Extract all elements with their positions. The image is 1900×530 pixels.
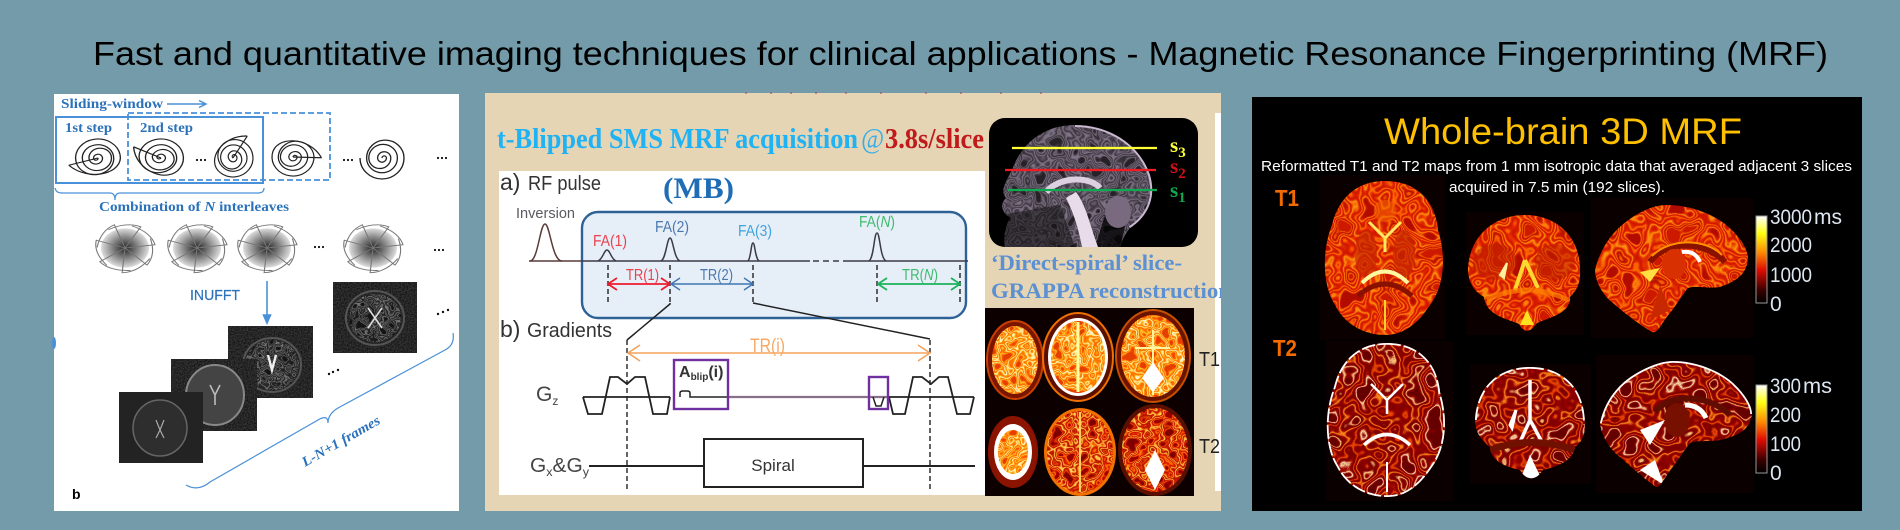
blip boxes	[674, 360, 888, 409]
T1 sagittal map	[1591, 198, 1753, 338]
T1 colour bar: 3000	[1770, 206, 1812, 229]
slice-GRAPPA heading: ‘Direct-spiral’ slice-	[991, 250, 1182, 275]
dashed timing guides	[608, 265, 960, 490]
TR arrows	[608, 278, 960, 361]
Gx and Gy label: G	[530, 455, 546, 477]
Gz label: G	[536, 383, 552, 406]
panel: sliding-window reconstruction	[52, 94, 459, 511]
SMS maps	[985, 308, 1194, 496]
flip-angle labels: FA(3)	[738, 223, 772, 240]
T1 colour bar: ms	[1814, 206, 1842, 229]
combined rosettes	[86, 215, 413, 279]
slice-GRAPPA heading	[992, 254, 1221, 298]
slice labels: s	[1170, 178, 1178, 202]
panel: t-blipped SMS MRF	[485, 93, 1231, 511]
head image	[1002, 125, 1152, 247]
slice labels: s	[1170, 154, 1178, 178]
blip label: (i)	[708, 364, 723, 381]
T1 colour bar: 0	[1770, 293, 1782, 316]
Gx and Gy label: x	[546, 465, 553, 479]
spiral readout: Spiral	[751, 456, 795, 475]
zoom connectors	[627, 303, 930, 340]
spiral readout	[589, 439, 975, 487]
T2 colour bar: 0	[1770, 462, 1782, 485]
acquisition heading: @	[861, 124, 884, 155]
flip-angle labels: FA(N)	[859, 214, 895, 231]
flip-angle labels	[593, 214, 895, 250]
ellipsis row two	[314, 246, 444, 251]
slice lines	[1005, 148, 1157, 190]
T2 map row	[988, 404, 1192, 496]
panel letter: b	[72, 486, 81, 502]
flip-angle labels: FA(1)	[593, 233, 627, 250]
T1 row label: T1	[1199, 349, 1220, 371]
T2 label: T2	[1273, 335, 1297, 361]
description: Reformatted T1 and T2 maps from 1 mm isotropic data that averaged adjacent 3 slices	[1261, 158, 1852, 175]
T1 colour bar: 1000	[1770, 264, 1812, 287]
combination label: Combination of N interleaves	[99, 200, 290, 215]
section a heading: a)	[500, 169, 520, 195]
frames label: L-N+1 frames	[299, 413, 384, 471]
title: Fast and quantitative imaging techniques for clinical applications - Magnetic Resonance Fingerprinting (MRF)	[93, 35, 1828, 72]
section a heading	[500, 169, 601, 195]
step labels	[65, 120, 193, 135]
slice labels	[1170, 133, 1186, 206]
T2 colour bar: 100	[1770, 433, 1801, 456]
T2 colour bar	[1756, 375, 1832, 485]
frames brace	[186, 333, 453, 488]
inversion label: Inversion	[516, 206, 575, 222]
acquisition heading: t-Blipped SMS MRF acquisition	[497, 124, 858, 155]
TR labels: TR(i)	[750, 336, 785, 357]
T2 row label: T2	[1199, 436, 1220, 458]
slice labels: 3	[1178, 145, 1186, 161]
sagittal slice inset	[989, 118, 1198, 250]
Gz waveform	[583, 377, 974, 414]
T1 colour bar	[1756, 206, 1842, 316]
description	[1261, 158, 1852, 196]
white diagram area	[499, 171, 985, 495]
sliding-window label: Sliding-window	[61, 96, 163, 111]
description: acquired in 7.5 min (192 slices).	[1449, 179, 1665, 196]
acquisition heading: 3.8s/slice	[885, 124, 984, 155]
step labels: 1st step	[65, 120, 112, 135]
Gz label: z	[552, 394, 558, 408]
INUFFT label: INUFFT	[190, 288, 240, 304]
brace under N interleaves	[55, 188, 264, 200]
section a heading: RF pulse	[528, 173, 601, 195]
sliding-window label	[61, 96, 206, 111]
section b heading: Gradients	[527, 320, 612, 342]
slice labels: s	[1170, 133, 1178, 157]
T1 axial map	[1320, 175, 1445, 340]
blip label: A	[679, 364, 691, 381]
T1 map row	[987, 310, 1190, 402]
spiral interleaves	[64, 128, 404, 185]
section b heading: b)	[500, 316, 520, 342]
RF pulse train	[529, 224, 968, 261]
T2 colour bar: 200	[1770, 404, 1801, 427]
T2 sagittal map	[1596, 355, 1754, 493]
image frames stack	[119, 282, 417, 463]
T1 coronal map	[1466, 212, 1584, 335]
flip-angle labels: FA(2)	[655, 219, 689, 236]
T2 colour bar: 300	[1770, 375, 1801, 398]
diagonal ellipsis	[328, 309, 449, 375]
Gx and Gy label: &G	[553, 455, 583, 477]
T2 colour bar: ms	[1803, 375, 1832, 398]
step labels: 2nd step	[140, 120, 193, 135]
TR labels: TR(1)	[626, 267, 659, 284]
Gx and Gy label: y	[583, 465, 589, 479]
slice labels: 1	[1178, 190, 1186, 206]
panel: whole-brain 3D MRF	[1252, 97, 1862, 511]
arrow down	[264, 281, 270, 323]
T2 coronal map	[1470, 364, 1591, 484]
TR labels: TR(2)	[700, 267, 733, 284]
blip label: blip	[691, 372, 708, 383]
panel heading: Whole-brain 3D MRF	[1384, 111, 1742, 152]
slice labels: 2	[1178, 166, 1186, 182]
section b heading	[500, 316, 612, 342]
T1 label: T1	[1275, 185, 1299, 211]
T1 colour bar: 2000	[1770, 234, 1812, 257]
MB label: (MB)	[663, 172, 734, 205]
TR labels	[626, 267, 938, 357]
MB highlight box	[582, 212, 966, 318]
slice-GRAPPA heading: GRAPPA reconstruction	[991, 278, 1231, 303]
T2 axial map	[1322, 340, 1453, 501]
step windows	[56, 113, 330, 183]
TR labels: TR(N)	[902, 267, 938, 284]
ellipsis row one	[196, 157, 447, 161]
